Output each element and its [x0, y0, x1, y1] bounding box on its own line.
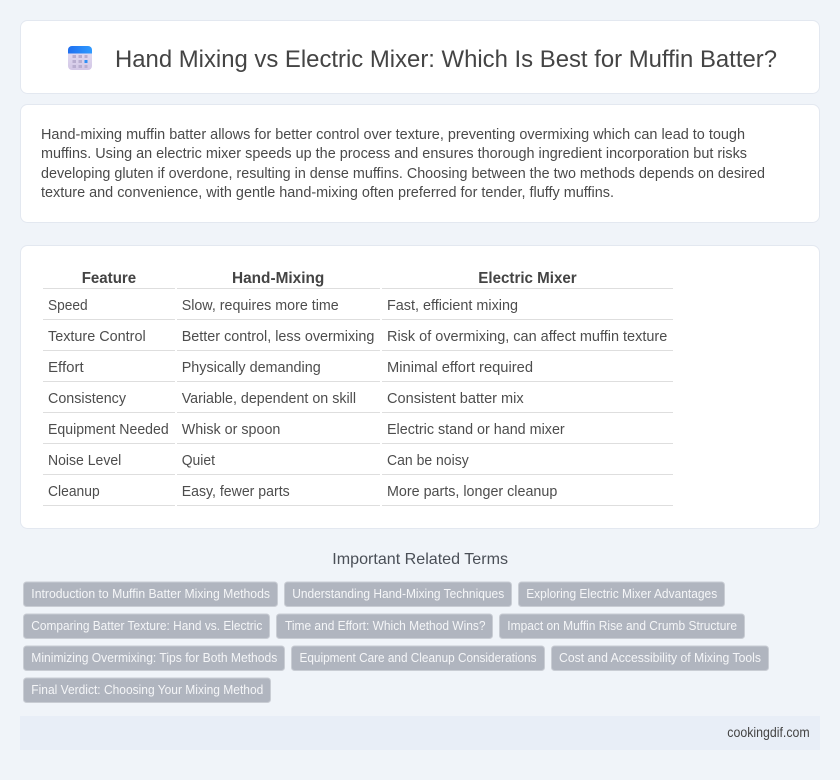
tag: Impact on Muffin Rise and Crumb Structure — [507, 618, 737, 633]
row: equipment needed: Electric stand or hand mixer — [387, 422, 565, 438]
panel: title header — [20, 20, 820, 94]
row: speed: Slow, requires more time — [182, 298, 339, 314]
table header row — [43, 270, 673, 288]
tag: Comparing Batter Texture: Hand vs. Electric — [31, 618, 263, 633]
row: texture control: Risk of overmixing, can affect muffin texture — [387, 329, 667, 345]
tag — [276, 614, 492, 638]
panel: introduction text — [20, 104, 820, 222]
row: cleanup: More parts, longer cleanup — [387, 484, 557, 500]
row: noise level: Quiet — [182, 453, 215, 469]
tag: Exploring Electric Mixer Advantages — [526, 586, 718, 601]
row: equipment needed: Equipment Needed — [48, 422, 169, 438]
row: equipment needed: Whisk or spoon — [182, 422, 280, 438]
footer bar — [20, 716, 820, 750]
row: noise level: Can be noisy — [387, 453, 469, 469]
tag — [518, 582, 724, 606]
row: equipment needed — [43, 422, 673, 444]
tag: Understanding Hand-Mixing Techniques — [292, 586, 505, 601]
title: Hand Mixing vs Electric Mixer: Which Is Best for Muffin Batter? — [115, 46, 777, 73]
paragraph — [41, 127, 765, 201]
tag — [24, 646, 284, 670]
row: consistency: Consistent batter mix — [387, 391, 524, 407]
row: consistency: Variable, dependent on skill — [182, 391, 356, 407]
row: cleanup: Easy, fewer parts — [182, 484, 290, 500]
tag — [500, 614, 744, 638]
tag: Equipment Care and Cleanup Considerations — [300, 650, 537, 665]
paragraph: texture and convenience, with gentle hand-mixing often preferred for tender, fluffy muffins. — [41, 185, 614, 201]
tag: Time and Effort: Which Method Wins? — [285, 618, 486, 633]
row: cleanup — [43, 484, 673, 506]
row: noise level: Noise Level — [48, 453, 121, 469]
row: consistency — [43, 391, 673, 412]
paragraph: muffins. Using an electric mixer speeds up the process and ensures thorough ingredient incorporation but risks — [41, 146, 747, 162]
tag: Final Verdict: Choosing Your Mixing Method — [31, 682, 263, 697]
table header row: Feature — [82, 270, 136, 287]
tag — [24, 614, 270, 638]
row: effort — [43, 360, 673, 382]
tag — [24, 582, 278, 606]
panel: related term tags — [24, 582, 768, 702]
row: speed: Speed — [48, 298, 88, 314]
table header row: Hand-Mixing — [232, 270, 324, 287]
panel: comparison table — [20, 246, 820, 528]
tag — [552, 646, 768, 670]
row: effort: Physically demanding — [182, 360, 321, 376]
tag: Introduction to Muffin Batter Mixing Methods — [31, 586, 270, 601]
table header row: Electric Mixer — [478, 270, 577, 287]
row: speed: Fast, efficient mixing — [387, 298, 518, 314]
paragraph: Hand-mixing muffin batter allows for better control over texture, preventing overmixing which can lead to tough — [41, 127, 745, 143]
row: speed — [43, 298, 673, 320]
tag: Minimizing Overmixing: Tips for Both Methods — [31, 650, 278, 665]
paragraph: developing gluten if overdone, resulting in dense muffins. Choosing between the two methods depends on desired — [41, 166, 765, 182]
icon: calendar — [68, 46, 92, 70]
row: texture control: Texture Control — [48, 329, 146, 345]
row: noise level — [43, 453, 673, 474]
tag — [24, 678, 270, 702]
heading: important related terms: Important Related Terms — [332, 551, 508, 568]
row: texture control — [43, 329, 673, 350]
row: cleanup: Cleanup — [48, 484, 100, 500]
row: effort: Effort — [48, 360, 84, 376]
row: effort: Minimal effort required — [387, 360, 533, 376]
footer source text: cookingdif.com — [727, 725, 810, 740]
tag — [292, 646, 544, 670]
row: texture control: Better control, less overmixing — [182, 329, 374, 345]
tag: Cost and Accessibility of Mixing Tools — [559, 650, 761, 665]
row: consistency: Consistency — [48, 391, 127, 407]
tag — [284, 582, 512, 606]
